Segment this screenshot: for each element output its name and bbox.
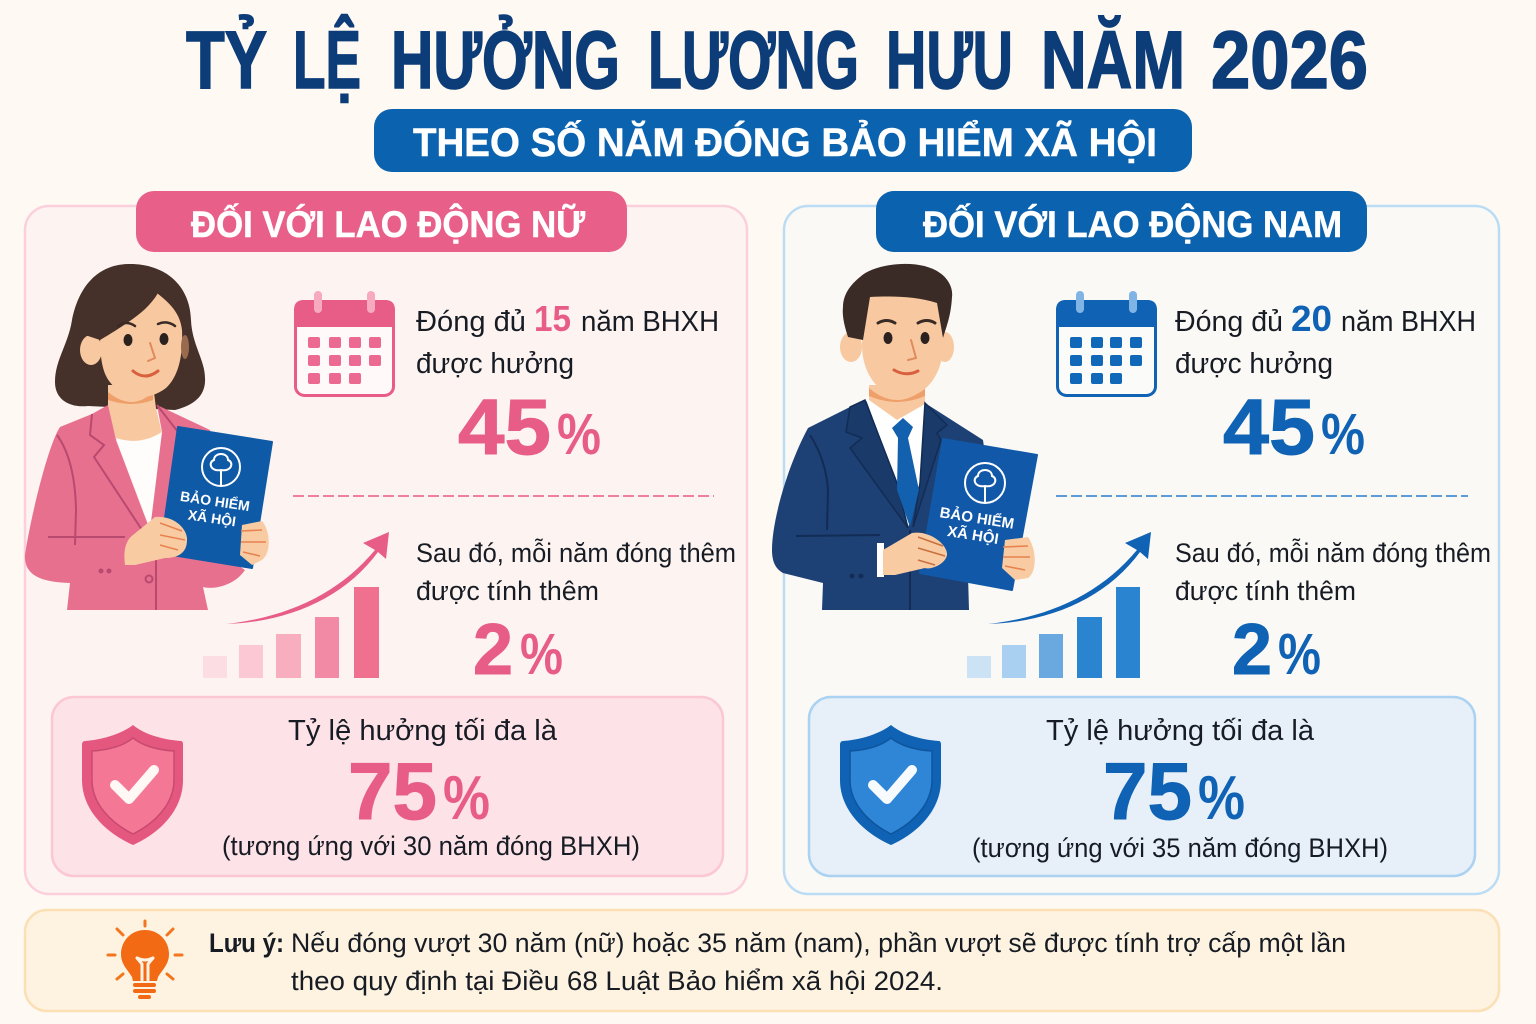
note text xyxy=(209,928,1346,996)
callout: maximum rate female: Tỷ lệ hưởng tối đa là xyxy=(288,715,558,747)
text: 15 years qualifying: năm BHXH xyxy=(581,306,719,338)
callout: maximum rate male: % xyxy=(1198,764,1245,833)
callout: maximum rate female: (tương ứng với 30 năm đóng BHXH) xyxy=(222,831,640,861)
title: LỆ xyxy=(293,15,361,106)
note text: Lưu ý: xyxy=(209,928,284,958)
heading: female workers: ĐỐI VỚI LAO ĐỘNG NỮ xyxy=(191,203,585,245)
panel: female workers xyxy=(25,191,747,894)
title: HƯỞNG xyxy=(391,15,620,106)
illustration: woman holding social insurance book xyxy=(25,264,272,610)
callout: maximum rate female: 75 xyxy=(348,747,437,837)
text: 20 years qualifying: năm BHXH xyxy=(1341,306,1476,338)
illustration: woman holding social insurance book: XÃ HỘI xyxy=(187,506,237,529)
text: 20 years qualifying xyxy=(1175,298,1476,380)
callout: maximum rate female xyxy=(52,697,723,876)
number: 45 percent xyxy=(1223,382,1365,471)
text: 20 years qualifying: được hưởng xyxy=(1175,348,1333,380)
chart: rising bars with arrow xyxy=(967,532,1151,678)
heading: female workers xyxy=(136,191,627,252)
text: 15 years qualifying xyxy=(416,298,719,380)
number: 45 percent: % xyxy=(1321,402,1365,467)
icon: calendar xyxy=(1056,291,1157,396)
text: additional years: Sau đó, mỗi năm đóng thêm xyxy=(416,537,736,568)
number: 2 percent xyxy=(473,610,563,690)
panel background: female xyxy=(25,206,747,894)
text: 15 years qualifying: 15 xyxy=(534,298,571,339)
number: 45 percent xyxy=(458,382,601,471)
icon: shield check xyxy=(82,725,183,845)
title: NĂM xyxy=(1041,15,1185,106)
panel background: male xyxy=(784,206,1499,894)
callout: maximum rate male xyxy=(809,697,1475,876)
illustration: woman holding social insurance book: BẢO HIỂM xyxy=(179,487,251,514)
chart: rising bars with arrow xyxy=(203,532,389,678)
number: 45 percent: 45 xyxy=(458,382,551,471)
number: 2 percent: 2 xyxy=(1232,610,1272,690)
callout: maximum rate male: Tỷ lệ hưởng tối đa là xyxy=(1046,715,1315,747)
number: 2 percent: % xyxy=(1278,622,1321,687)
illustration: man holding social insurance book xyxy=(772,264,1037,610)
icon: light bulb xyxy=(108,921,182,999)
text: additional years xyxy=(416,537,736,606)
callout: maximum rate male: (tương ứng với 35 năm đóng BHXH) xyxy=(972,833,1388,863)
text: additional years: được tính thêm xyxy=(1175,576,1356,606)
title: HƯU xyxy=(886,15,1013,106)
title: TỶ xyxy=(186,14,267,106)
number: 2 percent: % xyxy=(520,622,563,687)
text: additional years: Sau đó, mỗi năm đóng thêm xyxy=(1175,537,1491,568)
text: 15 years qualifying: được hưởng xyxy=(416,348,574,380)
number: 45 percent: % xyxy=(557,402,601,467)
title: LƯƠNG xyxy=(648,15,859,106)
icon: shield check xyxy=(840,725,941,845)
title xyxy=(186,14,1368,106)
illustration: man holding social insurance book: XÃ HỘI xyxy=(946,522,1000,548)
icon: calendar xyxy=(294,291,395,396)
text: additional years xyxy=(1175,537,1491,606)
subtitle banner: THEO SỐ NĂM ĐÓNG BẢO HIỂM XÃ HỘI xyxy=(413,118,1157,165)
number: 2 percent: 2 xyxy=(473,610,513,690)
text: additional years: được tính thêm xyxy=(416,576,599,606)
subtitle banner xyxy=(374,109,1192,172)
illustration: man holding social insurance book: BẢO HIỂM xyxy=(939,503,1015,533)
number: 2 percent xyxy=(1232,610,1321,690)
text: 20 years qualifying: 20 xyxy=(1291,298,1332,339)
note text: Nếu đóng vượt 30 năm (nữ) hoặc 35 năm (nam), phần vượt sẽ được tính trợ cấp một lần xyxy=(291,928,1346,958)
callout: maximum rate male: 75 xyxy=(1103,747,1192,837)
text: 15 years qualifying: Đóng đủ xyxy=(416,306,526,338)
callout: maximum rate female: % xyxy=(443,764,490,833)
panel: male workers xyxy=(772,191,1499,894)
heading: male workers: ĐỐI VỚI LAO ĐỘNG NAM xyxy=(923,203,1342,245)
note box xyxy=(25,910,1499,1011)
note text: theo quy định tại Điều 68 Luật Bảo hiểm xã hội 2024. xyxy=(291,966,943,996)
text: 20 years qualifying: Đóng đủ xyxy=(1175,306,1283,338)
heading: male workers xyxy=(876,191,1367,252)
number: 45 percent: 45 xyxy=(1223,382,1315,471)
title: 2026 xyxy=(1211,15,1368,106)
